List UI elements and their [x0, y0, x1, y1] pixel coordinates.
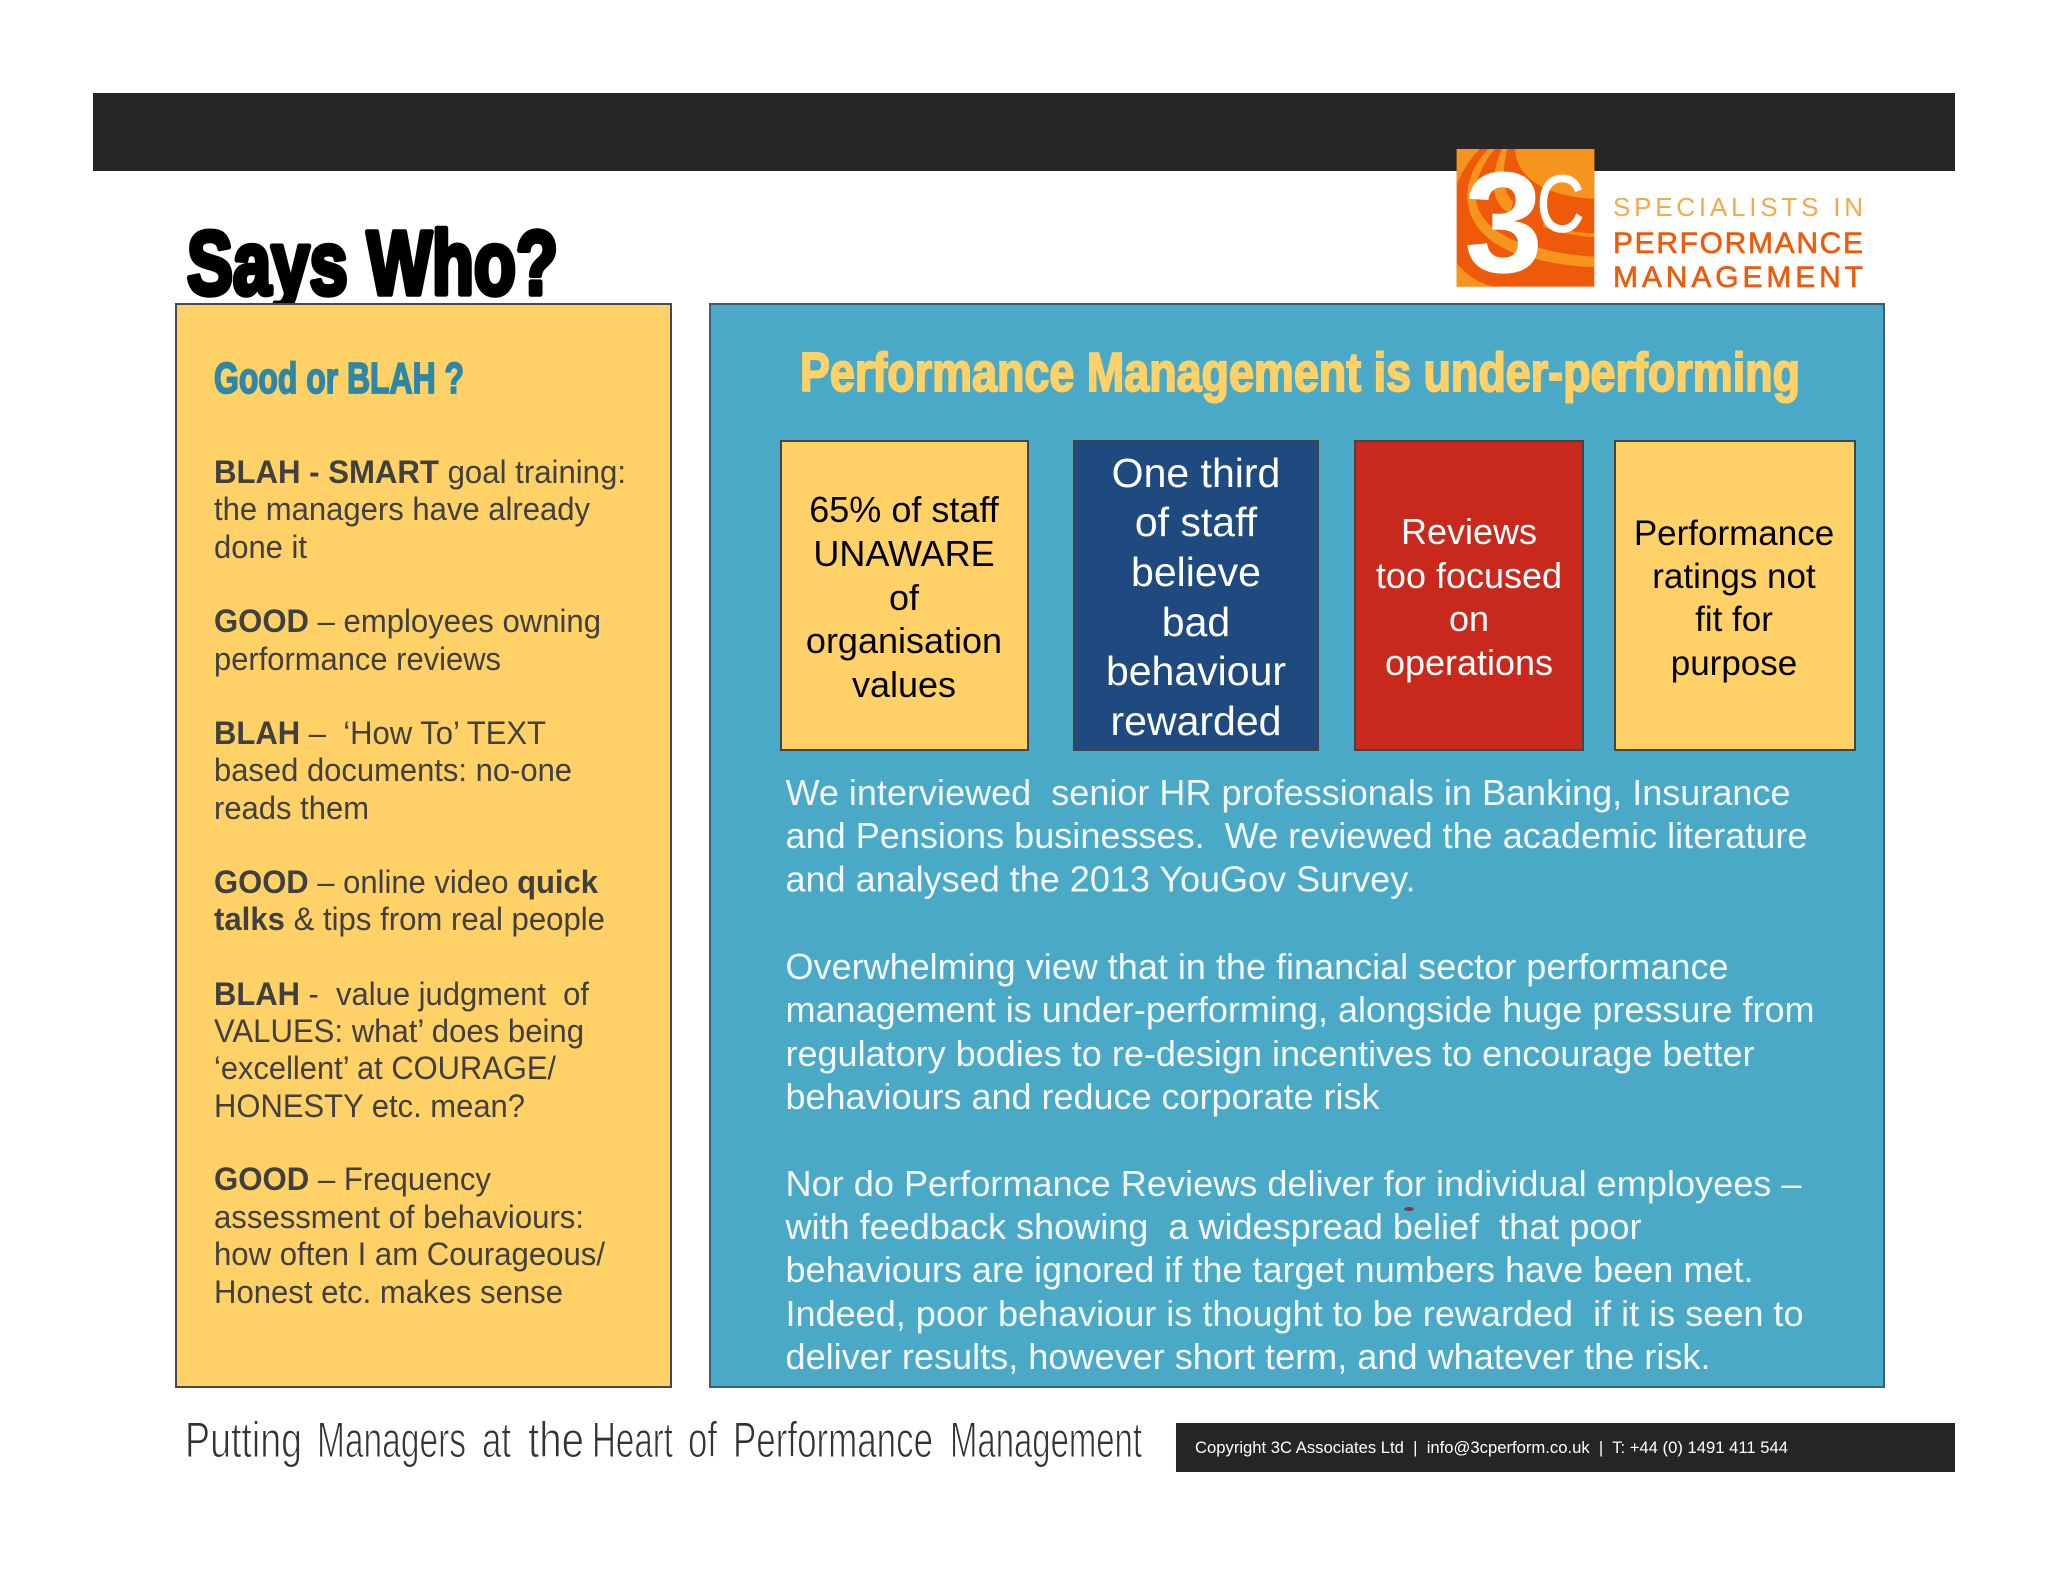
- item: SMART goal training: the managers have already: [214, 491, 590, 527]
- item: how-to documents: based documents: no-one: [214, 752, 572, 788]
- item: frequency assessment: assessment of behaviours:: [214, 1199, 584, 1235]
- stat box: ratings not fit: fit for: [1695, 600, 1773, 639]
- paragraph: research: We interviewed senior HR professionals in Banking, Insurance: [786, 772, 1790, 813]
- paragraph: overwhelming view: management is under-performing, alongside huge pressure from: [786, 989, 1814, 1030]
- paragraph: individual employees: with feedback showing a widespread belief that poor: [784, 1206, 1642, 1247]
- stray annotation mark: [1404, 1207, 1414, 1211]
- stat box: reviews on operations: Reviews: [1401, 511, 1537, 552]
- paragraph: research: [786, 772, 1808, 900]
- paragraph: overwhelming view: [786, 946, 1814, 1117]
- item: value judgment: [214, 976, 589, 1124]
- stat box: bad behaviour rewarded: behaviour: [1106, 648, 1286, 694]
- item: frequency assessment: Honest etc. makes sense: [214, 1274, 563, 1310]
- title: Says Who?: [187, 214, 558, 314]
- item: employees owning reviews: performance reviews: [214, 641, 501, 677]
- stat box: reviews on operations: on: [1449, 598, 1489, 639]
- stat box: bad behaviour rewarded: believe: [1131, 549, 1261, 595]
- stat box: ratings not fit: purpose: [1671, 644, 1797, 683]
- stat box: staff unaware: organisation: [806, 620, 1002, 661]
- item: online video talks: GOOD – online video quick: [214, 864, 598, 900]
- tagline: [185, 1412, 1142, 1468]
- item: how-to documents: reads them: [214, 790, 369, 826]
- stat box: ratings not fit: [1615, 441, 1855, 750]
- paragraph: research: and analysed the 2013 YouGov Survey.: [786, 858, 1416, 900]
- panel heading: Good or BLAH ?: [214, 354, 464, 403]
- tagline: Management: [950, 1412, 1142, 1468]
- paragraph: individual employees: Nor do Performance Reviews deliver for individual employees –: [786, 1163, 1802, 1204]
- item: value judgment: ‘excellent’ at COURAGE/: [214, 1050, 556, 1086]
- stat box: staff unaware: [781, 441, 1028, 750]
- header bar: [93, 93, 1955, 171]
- stat box: bad behaviour rewarded: bad: [1162, 599, 1230, 645]
- item: SMART goal training: [214, 454, 626, 565]
- paragraph: individual employees: deliver results, however short term, and whatever the risk.: [786, 1336, 1710, 1377]
- paragraph: overwhelming view: Overwhelming view that in the financial sector performance: [786, 946, 1728, 987]
- panel heading: Performance Management is under-performing: [800, 341, 1800, 403]
- stat box: staff unaware: values: [852, 664, 956, 705]
- paragraph: overwhelming view: regulatory bodies to re-design incentives to encourage better: [786, 1033, 1755, 1074]
- tagline: Heart: [592, 1412, 673, 1468]
- copyright and contact text: Copyright 3C Associates Ltd | info@3cperform.co.uk | T: +44 (0) 1491 411 544: [1195, 1438, 1788, 1457]
- stat box: staff unaware: of: [889, 577, 920, 618]
- stat box: ratings not fit: ratings not: [1652, 557, 1816, 596]
- item: value judgment: HONESTY etc. mean?: [214, 1088, 525, 1124]
- item: SMART goal training: done it: [214, 529, 307, 565]
- tagline: at: [482, 1412, 511, 1468]
- logo tagline: [1613, 192, 1863, 294]
- paragraph: overwhelming view: behaviours and reduce corporate risk: [786, 1076, 1380, 1117]
- panel: good or blah: [176, 304, 671, 1387]
- paragraph: research: and Pensions businesses. We reviewed the academic literature: [786, 815, 1808, 856]
- tagline: Putting: [185, 1412, 302, 1468]
- item: how-to documents: [214, 715, 572, 826]
- footer bar: [1176, 1423, 1955, 1472]
- stat box: bad behaviour rewarded: One third: [1112, 450, 1280, 496]
- item: value judgment: BLAH - value judgment of: [214, 976, 589, 1012]
- item: employees owning reviews: GOOD – employees owning: [214, 603, 601, 639]
- item: online video talks: [214, 864, 605, 937]
- stat box: bad behaviour rewarded: rewarded: [1111, 698, 1281, 744]
- panel: performance management: [710, 304, 1884, 1387]
- stat box: ratings not fit: Performance: [1634, 514, 1834, 553]
- item: frequency assessment: how often I am Courageous/: [214, 1236, 605, 1272]
- paragraph: individual employees: Indeed, poor behaviour is thought to be rewarded if it is seen to: [786, 1293, 1804, 1334]
- paragraph: individual employees: [784, 1163, 1804, 1377]
- item: online video talks: talks & tips from real people: [214, 901, 605, 937]
- stat box: bad behaviour rewarded: of staff: [1135, 499, 1258, 545]
- item: frequency assessment: GOOD – Frequency: [214, 1161, 491, 1197]
- paragraph: individual employees: behaviours are ignored if the target numbers have been met.: [786, 1249, 1754, 1290]
- tagline: the: [528, 1412, 584, 1468]
- stat box: reviews on operations: too focused: [1376, 555, 1562, 596]
- logo: 3C Specialists in Performance Management: [1457, 142, 1863, 303]
- item: employees owning reviews: [214, 603, 601, 677]
- stat box: reviews on operations: operations: [1385, 642, 1553, 683]
- logo tagline: PERFORMANCE: [1613, 227, 1863, 260]
- stat box: reviews on operations: [1355, 441, 1583, 750]
- item: value judgment: VALUES: what’ does being: [214, 1013, 584, 1049]
- tagline: Performance: [733, 1412, 933, 1468]
- logo mark: C: [1537, 159, 1584, 248]
- stat box: staff unaware: 65% of staff: [809, 489, 1000, 530]
- item: SMART goal training: BLAH - SMART goal training:: [214, 454, 626, 490]
- stat box: staff unaware: UNAWARE: [813, 533, 995, 574]
- tagline: Managers: [317, 1412, 466, 1468]
- item: frequency assessment: [214, 1161, 605, 1310]
- logo mark: 3: [1464, 142, 1543, 303]
- logo tagline: MANAGEMENT: [1613, 261, 1863, 294]
- item: how-to documents: BLAH – ‘How To’ TEXT: [214, 715, 546, 751]
- logo mark: [1457, 142, 1594, 303]
- stat box: bad behaviour rewarded: [1074, 441, 1318, 750]
- logo tagline: SPECIALISTS IN: [1613, 192, 1863, 222]
- tagline: of: [688, 1412, 717, 1468]
